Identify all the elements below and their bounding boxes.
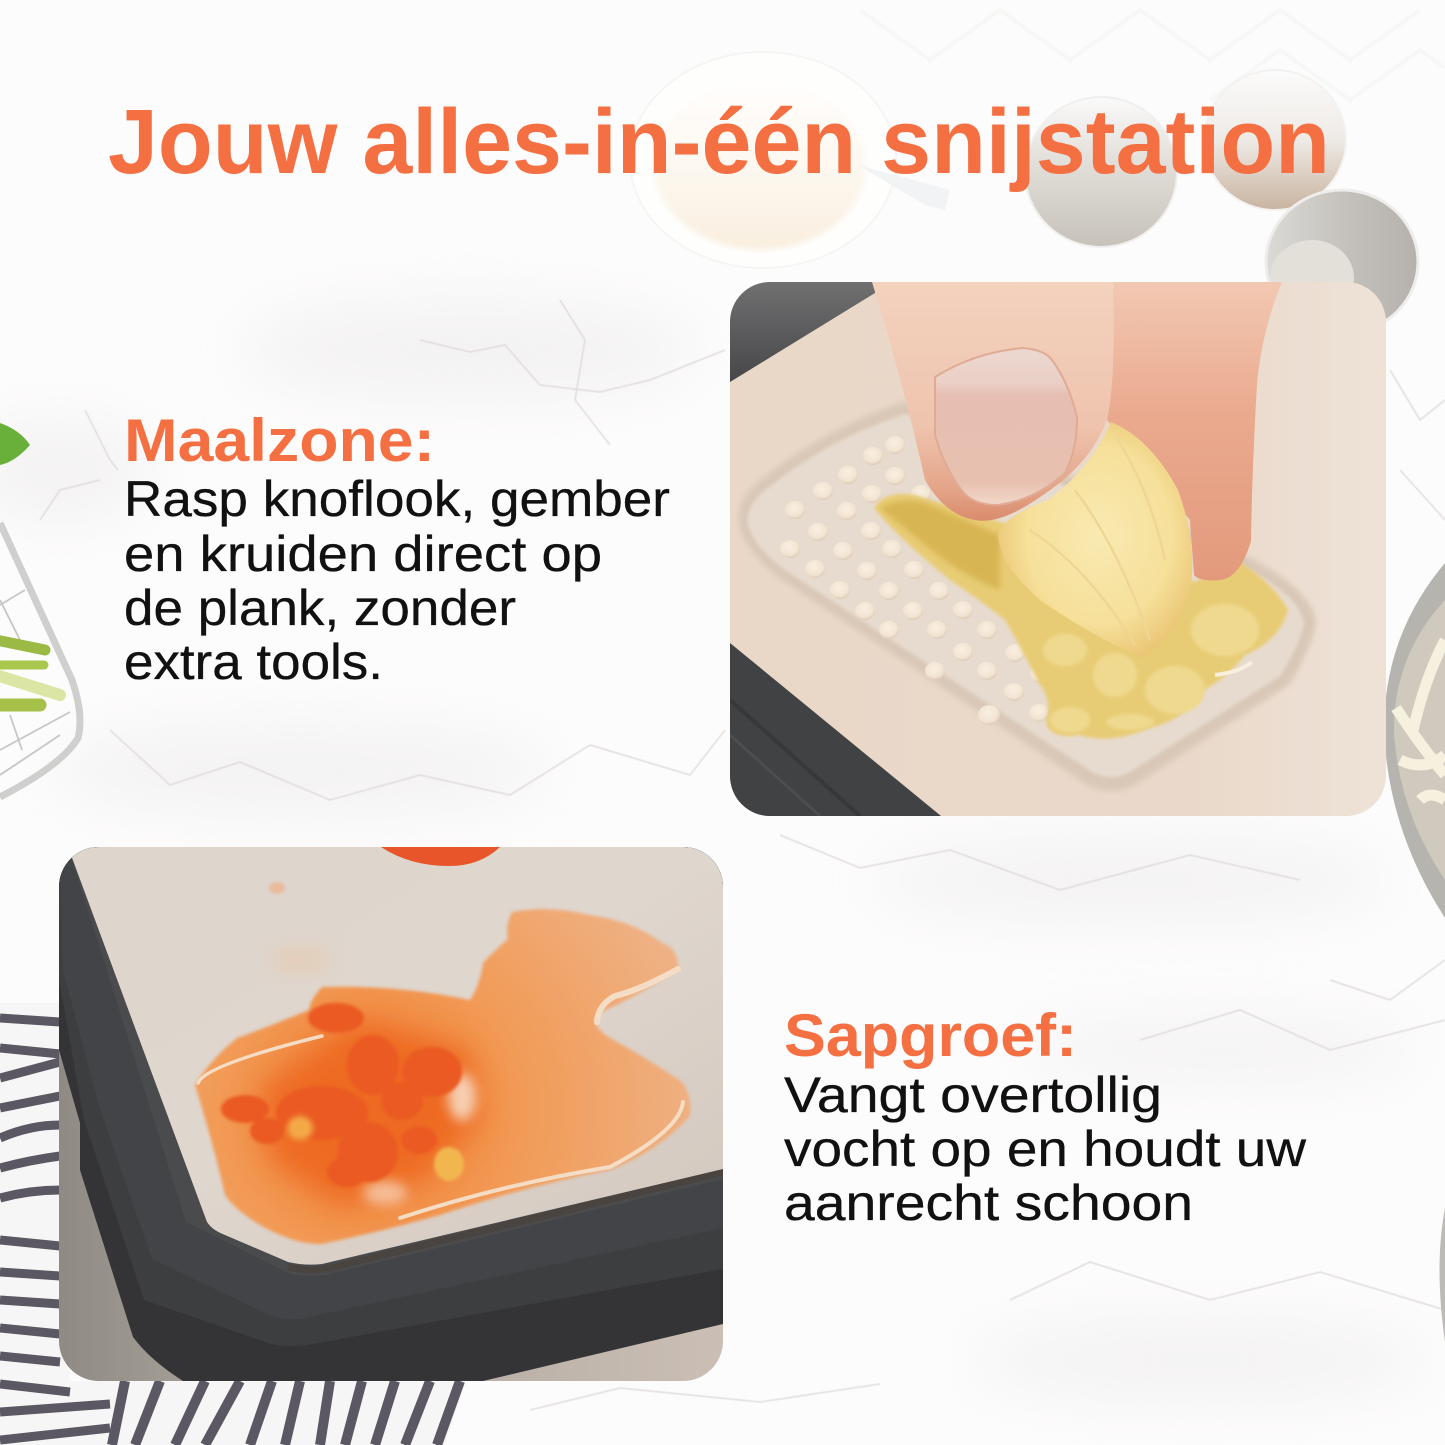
description: Sapgroef: vocht op en houdt uw (784, 1121, 1307, 1177)
striped towel: bottom left (0, 1003, 466, 1445)
recessed grating zone (738, 401, 1316, 791)
heading: Maalzone: Maalzone: (124, 407, 435, 474)
bowl: grated cheese (630, 52, 950, 268)
heading: Sapgroef: Sapgroef: (784, 1002, 1077, 1069)
tomato at top (381, 847, 500, 866)
title: Jouw alles-in-één snijstation (108, 91, 1330, 193)
cutting board dark frame (59, 847, 723, 1381)
board surface (730, 282, 1386, 816)
spice cups (1025, 70, 1418, 334)
description: Sapgroef: aanrecht schoon (784, 1175, 1193, 1231)
glossy patches (448, 1073, 476, 1121)
cup: salt (1266, 190, 1418, 334)
thumbnail (935, 348, 1077, 505)
wire basket with spring onions (0, 523, 80, 797)
cup: black pepper (1025, 97, 1177, 247)
icon: basil leaf (0, 423, 30, 465)
juice rim highlights (198, 969, 683, 1218)
juice spill (195, 909, 690, 1244)
juice drop (269, 882, 285, 894)
panel: grating zone photo (730, 282, 1386, 816)
tomato seeds (434, 1147, 464, 1181)
description: Maalzone: de plank, zonder (124, 580, 516, 636)
panel: juice groove photo (59, 847, 723, 1381)
board surface (68, 847, 723, 1265)
description: Sapgroef: Vangt overtollig (784, 1067, 1162, 1123)
thumb (872, 282, 1114, 521)
text block: Maalzone (124, 407, 684, 690)
back finger (1107, 282, 1282, 580)
text block: Sapgroef (784, 1002, 1320, 1231)
board dark edge bottom left (730, 643, 941, 816)
description: Maalzone: Rasp knoflook, gember (124, 471, 670, 527)
board dark edge top left (730, 282, 875, 382)
metal bowl with onions: right edge (1384, 563, 1445, 1342)
description: Maalzone: extra tools. (124, 634, 383, 690)
cup: chili flakes (1204, 70, 1346, 210)
tomato pulp chunks (221, 1003, 462, 1187)
description: Maalzone: en kruiden direct op (124, 526, 602, 582)
grater dots (780, 436, 1050, 725)
decorative: faint herringbone pattern top right (860, 10, 1445, 100)
grated garlic pulp (874, 494, 1288, 739)
garlic clove (998, 422, 1192, 658)
